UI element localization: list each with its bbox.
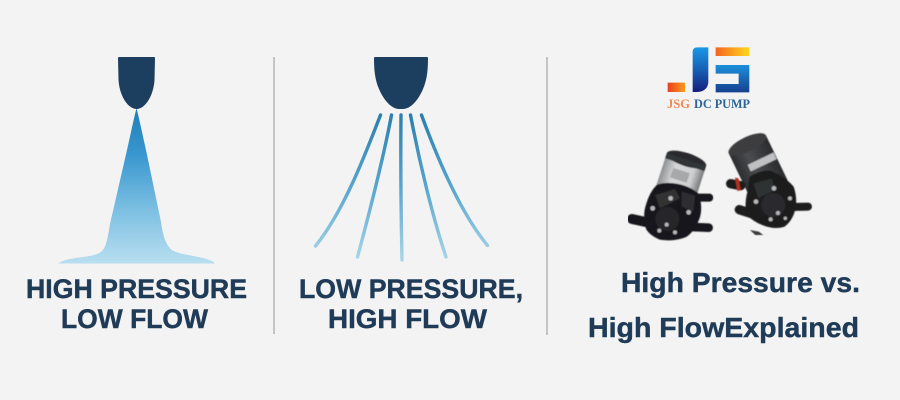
heading: high pressure vs. high flow explained	[588, 267, 860, 343]
icon: five water streams	[316, 115, 488, 260]
label: high pressure low flow: LOW FLOW	[61, 304, 208, 334]
label: low pressure high flow: HIGH FLOW	[328, 304, 487, 334]
icon: wide nozzle	[374, 57, 428, 109]
icon: spray cone	[58, 108, 215, 264]
icon: narrow nozzle	[118, 57, 155, 109]
label: low pressure high flow	[299, 274, 523, 334]
logo: JSG DC Pump	[667, 47, 750, 111]
photo: left pump	[632, 147, 709, 238]
heading: high pressure vs. high flow explained: High FlowExplained	[588, 312, 859, 343]
panel: brand and pumps	[588, 47, 860, 343]
label: low pressure high flow: LOW PRESSURE,	[299, 274, 523, 304]
logo: JSG DC Pump: DC PUMP	[694, 97, 750, 111]
panel: low pressure high flow	[299, 57, 523, 334]
label: high pressure low flow: HIGH PRESSURE	[26, 274, 247, 304]
divider	[546, 57, 548, 335]
label: high pressure low flow	[26, 274, 247, 334]
photo: right pump	[726, 129, 808, 235]
divider	[273, 57, 275, 334]
logo: JSG DC Pump: JSG	[667, 97, 690, 111]
panel: high pressure low flow	[26, 57, 247, 334]
heading: high pressure vs. high flow explained: High Pressure vs.	[621, 267, 860, 298]
